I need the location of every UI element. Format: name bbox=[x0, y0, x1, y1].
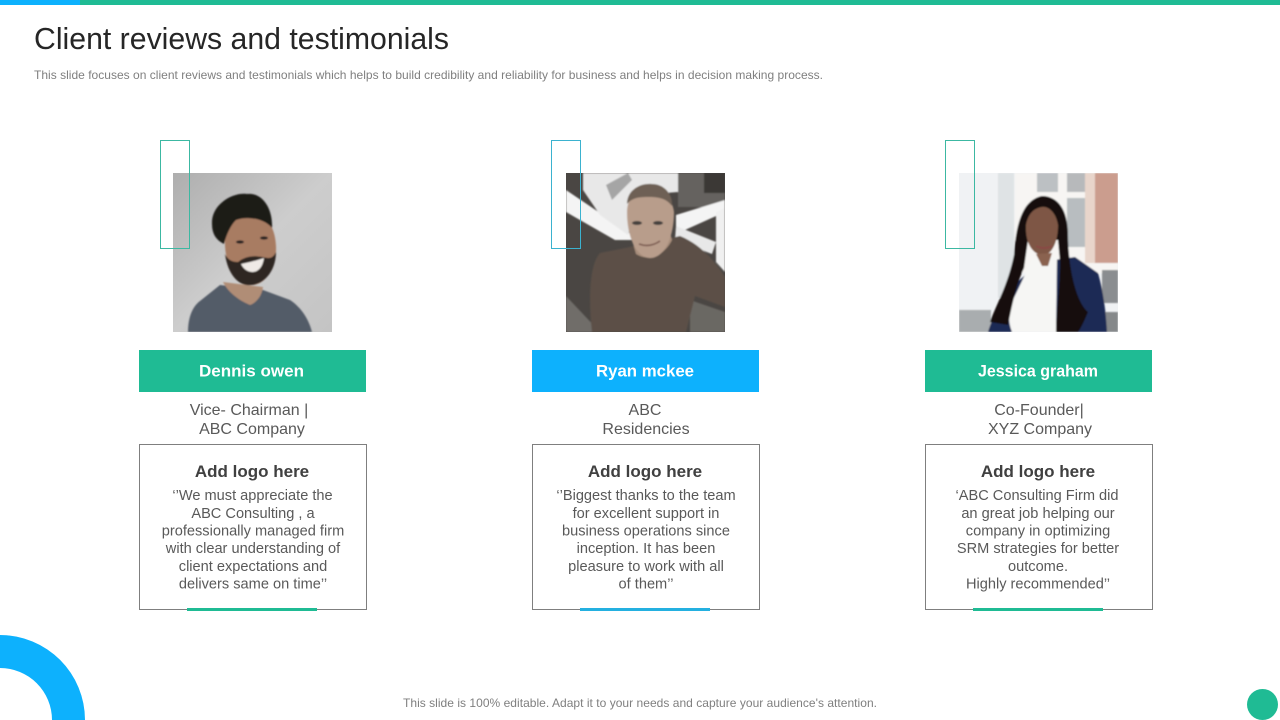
role: ABC Company bbox=[199, 421, 305, 438]
testimonial box bbox=[926, 444, 1152, 611]
testimonial box: of them’’ bbox=[619, 576, 673, 592]
testimonial box: Add logo here bbox=[981, 462, 1095, 481]
testimonial box: an great job helping our bbox=[961, 506, 1115, 522]
role: Co-Founder| bbox=[994, 402, 1084, 419]
bracket outline bbox=[946, 140, 974, 248]
testimonial box: professionally managed firm bbox=[162, 524, 344, 540]
subtitle: This slide focuses on client reviews and testimonials which helps to build credibility and reliability for business and helps in decision making process. bbox=[34, 68, 823, 82]
top accent bar bbox=[0, 0, 1280, 5]
panel: Jessica graham bbox=[925, 140, 1152, 611]
testimonial box: ABC Consulting , a bbox=[191, 506, 316, 522]
photo: Ryan mckee bbox=[566, 173, 725, 332]
role: Vice- Chairman | bbox=[190, 402, 308, 419]
role: Residencies bbox=[602, 421, 690, 438]
testimonial box: company in optimizing bbox=[966, 524, 1110, 540]
name bar: Ryan mckee bbox=[596, 362, 694, 380]
role: ABC bbox=[629, 402, 661, 419]
testimonial box: Add logo here bbox=[588, 462, 702, 481]
bracket outline bbox=[160, 140, 190, 248]
panel: Dennis owen bbox=[139, 140, 366, 611]
testimonial box: ‘’Biggest thanks to the team bbox=[556, 488, 736, 504]
testimonial box: delivers same on time’’ bbox=[179, 576, 327, 592]
role bbox=[190, 402, 308, 438]
photo: Jessica graham bbox=[959, 173, 1118, 332]
panel: Ryan mckee bbox=[532, 140, 760, 611]
photo: Dennis owen bbox=[173, 173, 332, 332]
title: Client reviews and testimonials bbox=[34, 21, 449, 56]
testimonial box: Add logo here bbox=[195, 462, 309, 481]
name bar bbox=[532, 350, 759, 392]
name bar bbox=[925, 350, 1152, 392]
name bar: Jessica graham bbox=[978, 362, 1098, 380]
testimonial box: outcome. bbox=[1008, 559, 1068, 575]
testimonial box bbox=[140, 444, 366, 611]
footer note: This slide is 100% editable. Adapt it to your needs and capture your audience's attention. bbox=[403, 696, 877, 710]
name bar: Dennis owen bbox=[199, 362, 304, 380]
role bbox=[988, 402, 1092, 438]
testimonial box: inception. It has been bbox=[577, 541, 715, 557]
bracket outline bbox=[552, 140, 580, 248]
testimonial box: ‘ABC Consulting Firm did bbox=[955, 488, 1119, 504]
role bbox=[602, 402, 690, 438]
testimonial box: for excellent support in bbox=[573, 506, 719, 522]
corner ring bbox=[0, 635, 85, 720]
testimonial box bbox=[532, 444, 760, 611]
testimonial box: client expectations and bbox=[179, 559, 327, 575]
testimonial box: ‘’We must appreciate the bbox=[172, 488, 333, 504]
testimonial box: SRM strategies for better bbox=[957, 541, 1119, 557]
role: XYZ Company bbox=[988, 421, 1092, 438]
testimonial box: business operations since bbox=[562, 524, 730, 540]
testimonial box: with clear understanding of bbox=[165, 541, 341, 557]
testimonial box: pleasure to work with all bbox=[568, 559, 724, 575]
corner dot bbox=[1247, 689, 1278, 720]
testimonial box: Highly recommended’’ bbox=[966, 576, 1110, 592]
name bar bbox=[139, 350, 366, 392]
